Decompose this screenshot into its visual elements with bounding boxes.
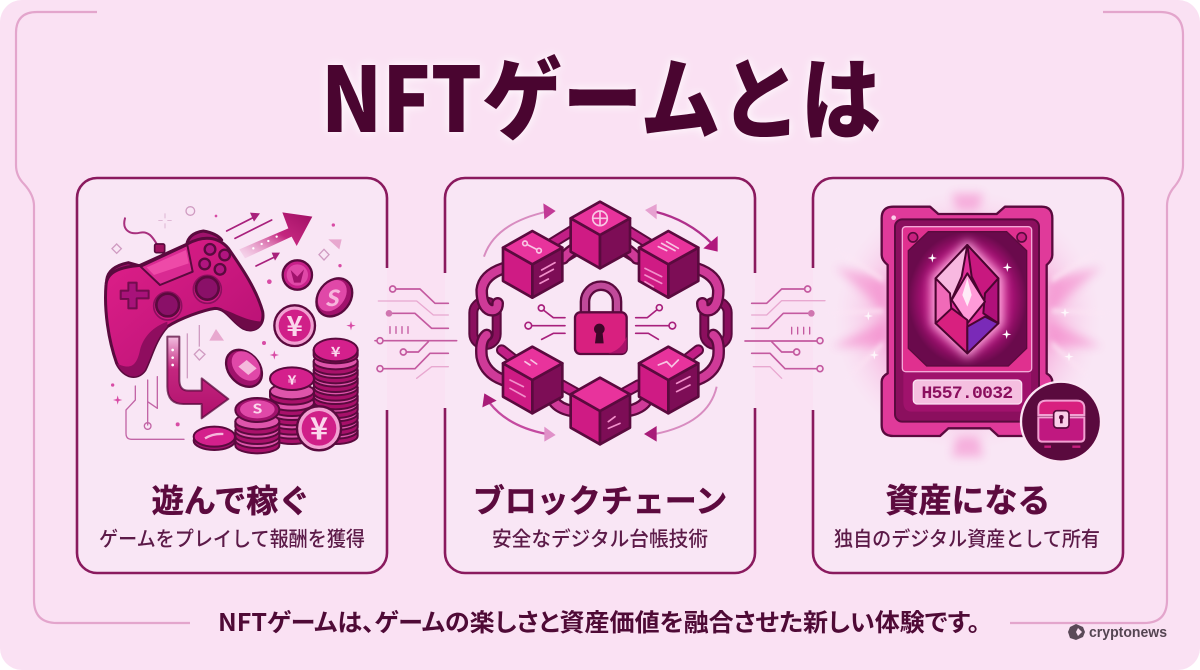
- cubes: [503, 202, 698, 444]
- heading: 資産になる: [886, 474, 1050, 522]
- icon: NFT card with gem: [825, 190, 1112, 462]
- subtext: 独自のデジタル資産として所有: [834, 522, 1100, 552]
- icon: upward arrow: [227, 212, 312, 266]
- heading: 遊んで稼ぐ: [152, 476, 310, 522]
- panel: digital asset: [813, 178, 1123, 573]
- icon: NFT card with gem: H557.0032: [921, 384, 1013, 404]
- icon: coin stacks: ¥: [331, 342, 341, 361]
- icon: coin stacks: ¥: [287, 371, 297, 389]
- connector: right circuit lines: [745, 286, 825, 378]
- icon: floating coins: [219, 260, 360, 394]
- chain links: [473, 230, 728, 412]
- icon: coin stacks: S: [252, 399, 262, 418]
- cycle arrows: [482, 203, 718, 442]
- icon: game controller, coins and arrows: [106, 207, 360, 453]
- panel: play to earn: [77, 178, 387, 573]
- icon: game controller, coins and arrows: S: [324, 281, 340, 313]
- title: NFTゲームとは: [321, 28, 881, 158]
- icon: blockchain ring with padlock: [473, 202, 728, 444]
- icon: coin stacks: ¥: [310, 404, 328, 449]
- heading: ブロックチェーン: [473, 476, 727, 522]
- icon: treasure chest badge: [1021, 382, 1101, 462]
- footer statement: NFTゲームは、ゲームの楽しさと資産価値を融合させた新しい体験です。: [218, 604, 980, 639]
- icon: coin stacks: [194, 339, 358, 453]
- subtext: ゲームをプレイして報酬を獲得: [99, 522, 365, 552]
- icon: downward arrow: [167, 337, 228, 418]
- panel: blockchain: [445, 178, 755, 573]
- padlock: [575, 286, 627, 354]
- subtext: 安全なデジタル台帳技術: [492, 522, 708, 552]
- circuit traces: [525, 305, 676, 339]
- glow rays: [825, 190, 1112, 457]
- icon: game controller, coins and arrows: ¥: [286, 305, 303, 345]
- connector: left circuit lines: [375, 286, 457, 378]
- logo: cryptonews: cryptonews: [1089, 624, 1167, 641]
